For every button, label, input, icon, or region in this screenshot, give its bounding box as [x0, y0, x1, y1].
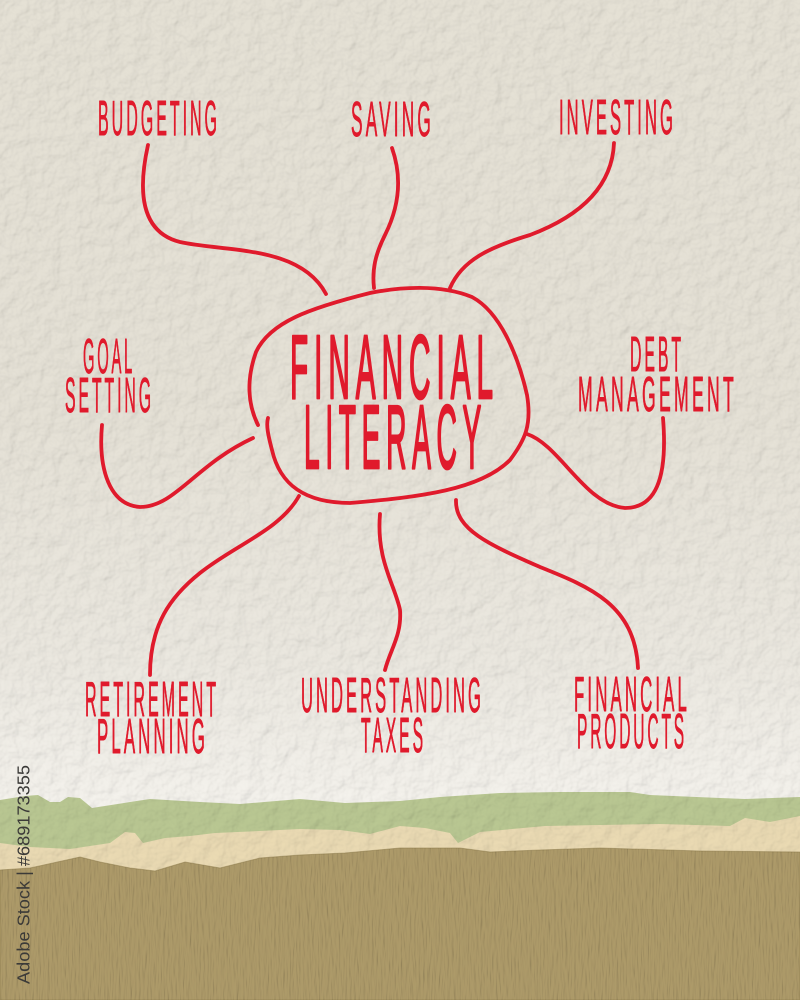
text: PLANNING	[97, 710, 208, 764]
label: understanding taxes: TAXES	[361, 709, 426, 763]
label: goal setting	[65, 330, 154, 423]
label: understanding taxes	[301, 669, 484, 763]
label: financial products	[574, 668, 690, 759]
text: GOAL	[83, 330, 135, 384]
label: retirement planning	[85, 673, 219, 764]
line: understanding taxes branch	[379, 514, 400, 670]
line: financial products branch	[456, 500, 638, 668]
text: RETIREMENT	[85, 673, 219, 727]
green paper strip	[0, 792, 800, 860]
label: debt management: DEBT	[630, 328, 684, 382]
line: budgeting branch	[143, 145, 326, 294]
line: investing branch	[450, 143, 614, 288]
text: BUDGETING	[98, 92, 220, 146]
line: goal setting branch	[101, 425, 253, 507]
line: debt management branch	[527, 418, 664, 508]
text: SETTING	[65, 369, 154, 423]
line: retirement planning branch	[150, 496, 299, 675]
cream paper strip	[0, 816, 800, 880]
central blob outline	[249, 288, 529, 503]
text: SAVING	[351, 93, 434, 147]
label: debt management	[578, 328, 737, 422]
watermark: stock id: Adobe Stock | #689173355	[14, 765, 34, 984]
title: financial literacy	[290, 318, 499, 488]
line: saving branch	[373, 148, 398, 288]
panel: brown paper sheet	[0, 840, 800, 1000]
